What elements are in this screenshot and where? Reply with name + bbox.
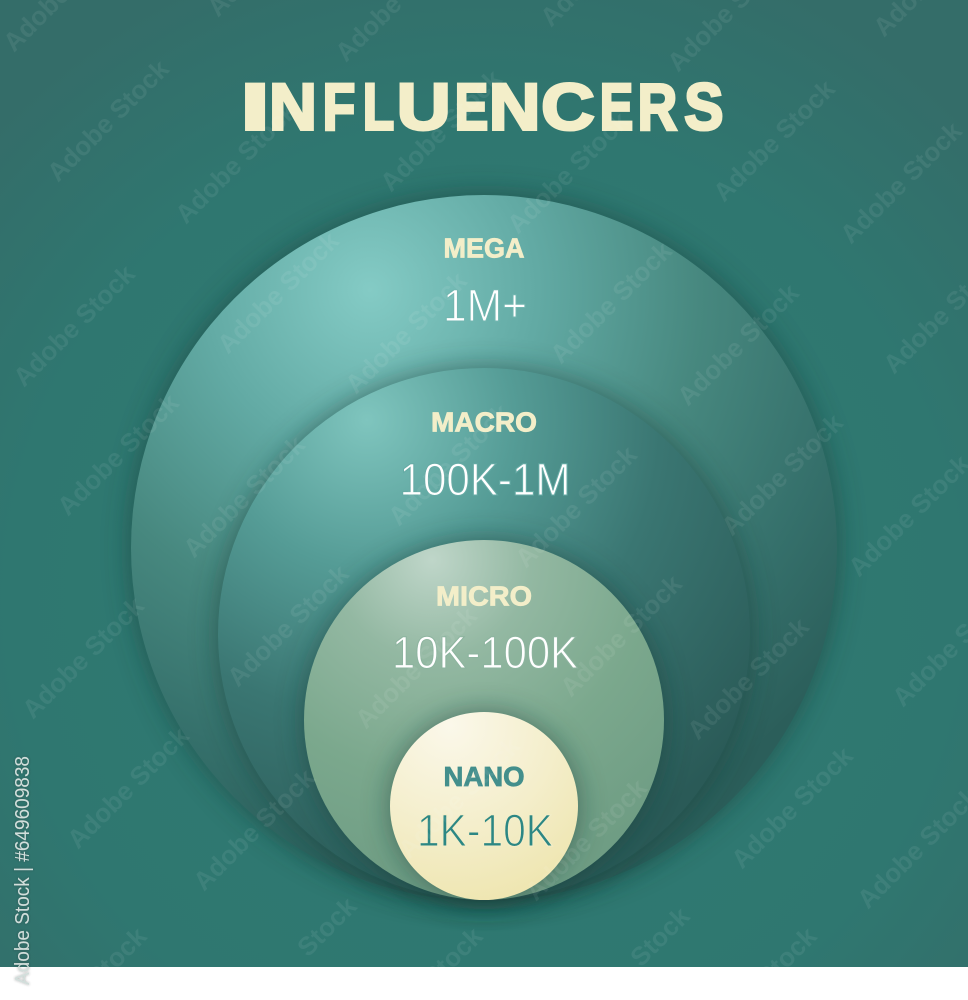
watermark pattern: Stock — [751, 921, 823, 992]
watermark pattern: Adobe Stock — [707, 73, 841, 207]
label: mega — [443, 232, 527, 331]
watermark pattern: Adobe Stock — [374, 63, 508, 197]
title: R — [638, 70, 677, 144]
label: micro — [392, 580, 578, 678]
title: S — [684, 70, 723, 144]
watermark pattern: Adobe Stock — [509, 439, 643, 573]
watermark pattern: Adobe Stock — [51, 387, 185, 521]
title: U — [397, 70, 451, 144]
watermark pattern: Adobe Stock — [834, 115, 968, 249]
watermark pattern: Adobe Stock — [187, 762, 321, 896]
label: macro: MACRO — [431, 406, 537, 438]
watermark pattern: Adobe Stock — [715, 407, 849, 541]
watermark pattern: Adobe Stock — [61, 720, 195, 854]
title: C — [541, 70, 595, 144]
watermark pattern: Adobe Stock — [544, 235, 678, 369]
label: mega: MEGA — [444, 232, 524, 264]
watermark pattern: Adobe Stock — [339, 265, 473, 399]
title: I — [240, 70, 270, 144]
nested circles chart — [131, 195, 837, 901]
title: N — [489, 70, 540, 144]
title: L — [363, 69, 394, 144]
watermark pattern: Adobe Stock — [349, 600, 483, 734]
watermark pattern: Adobe Stock — [41, 53, 175, 187]
watermark pattern: Adobe Stock — [725, 740, 859, 874]
watermark pattern: Adobe Stock — [681, 611, 815, 745]
title: F — [323, 70, 355, 144]
title: E — [455, 71, 488, 144]
circle: macro — [218, 368, 750, 900]
watermark pattern: Adobe Stock — [501, 105, 635, 239]
watermark pattern: Adobe Stock — [554, 568, 688, 702]
circle: mega — [131, 195, 837, 901]
label: micro: 10K-100K — [392, 627, 578, 678]
watermark pattern: Adobe Stock — [211, 225, 345, 359]
watermark pattern: Stock — [291, 891, 363, 962]
watermark pattern: Adobe Stock — [382, 397, 516, 531]
watermark pattern: Adobe Stock — [392, 730, 526, 864]
stock id: Adobe Stock | #649609838 — [12, 756, 34, 985]
watermark pattern: Stock — [81, 921, 153, 992]
watermark pattern: Stock — [417, 921, 489, 992]
label: micro: MICRO — [436, 580, 532, 612]
watermark pattern: Stock — [624, 901, 696, 972]
circle: micro — [304, 540, 664, 900]
watermark pattern: Adobe Stock — [7, 258, 141, 392]
label: nano: NANO — [444, 761, 524, 792]
label: macro — [400, 406, 570, 505]
watermark pattern: Adobe Stock — [169, 95, 303, 229]
watermark pattern: Adobe Stock — [519, 772, 653, 906]
label: mega: 1M+ — [443, 280, 527, 331]
label: nano — [417, 761, 553, 856]
watermark pattern: Adobe Stock — [177, 429, 311, 563]
circle: nano — [390, 712, 578, 900]
title: E — [600, 71, 633, 144]
title — [240, 69, 723, 144]
label: nano: 1K-10K — [417, 805, 553, 856]
watermark pattern: Adobe Stock — [16, 590, 150, 724]
watermark pattern: Adobe Stock — [671, 277, 805, 411]
label: macro: 100K-1M — [400, 454, 570, 505]
title: N — [269, 70, 317, 144]
watermark pattern: Adobe Stock — [221, 558, 355, 692]
